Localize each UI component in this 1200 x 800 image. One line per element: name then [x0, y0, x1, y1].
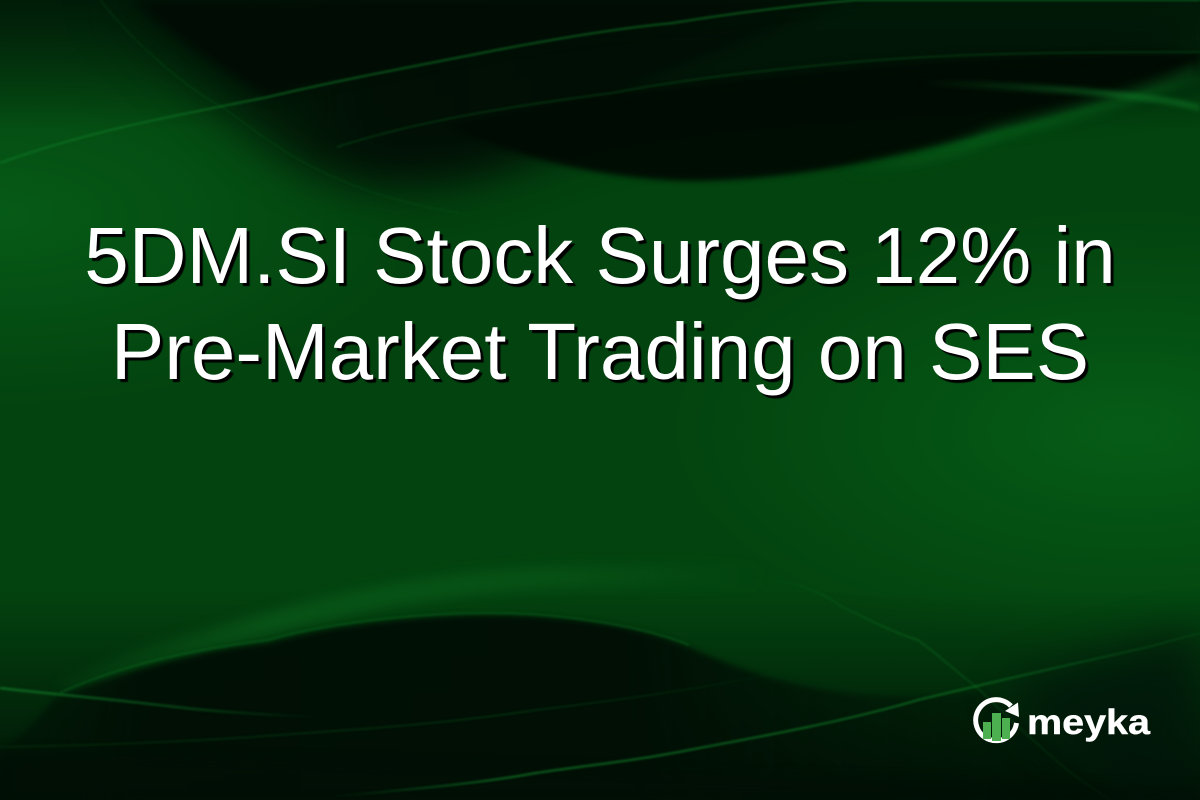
title: 5DM.SI Stock Surges 12% in [84, 211, 1116, 300]
bottom green streaks [0, 688, 321, 717]
bottom green bands [61, 576, 765, 693]
logo: meyka [973, 697, 1151, 744]
title [84, 211, 1116, 399]
icon: circular arrow with bars [976, 700, 1019, 741]
top dark region [100, 0, 1200, 188]
title: Pre-Market Trading on SES [111, 307, 1089, 396]
bottom dark wave [0, 615, 1120, 800]
top green streaks [0, 0, 1200, 163]
wordmark: meyka [1027, 703, 1151, 742]
